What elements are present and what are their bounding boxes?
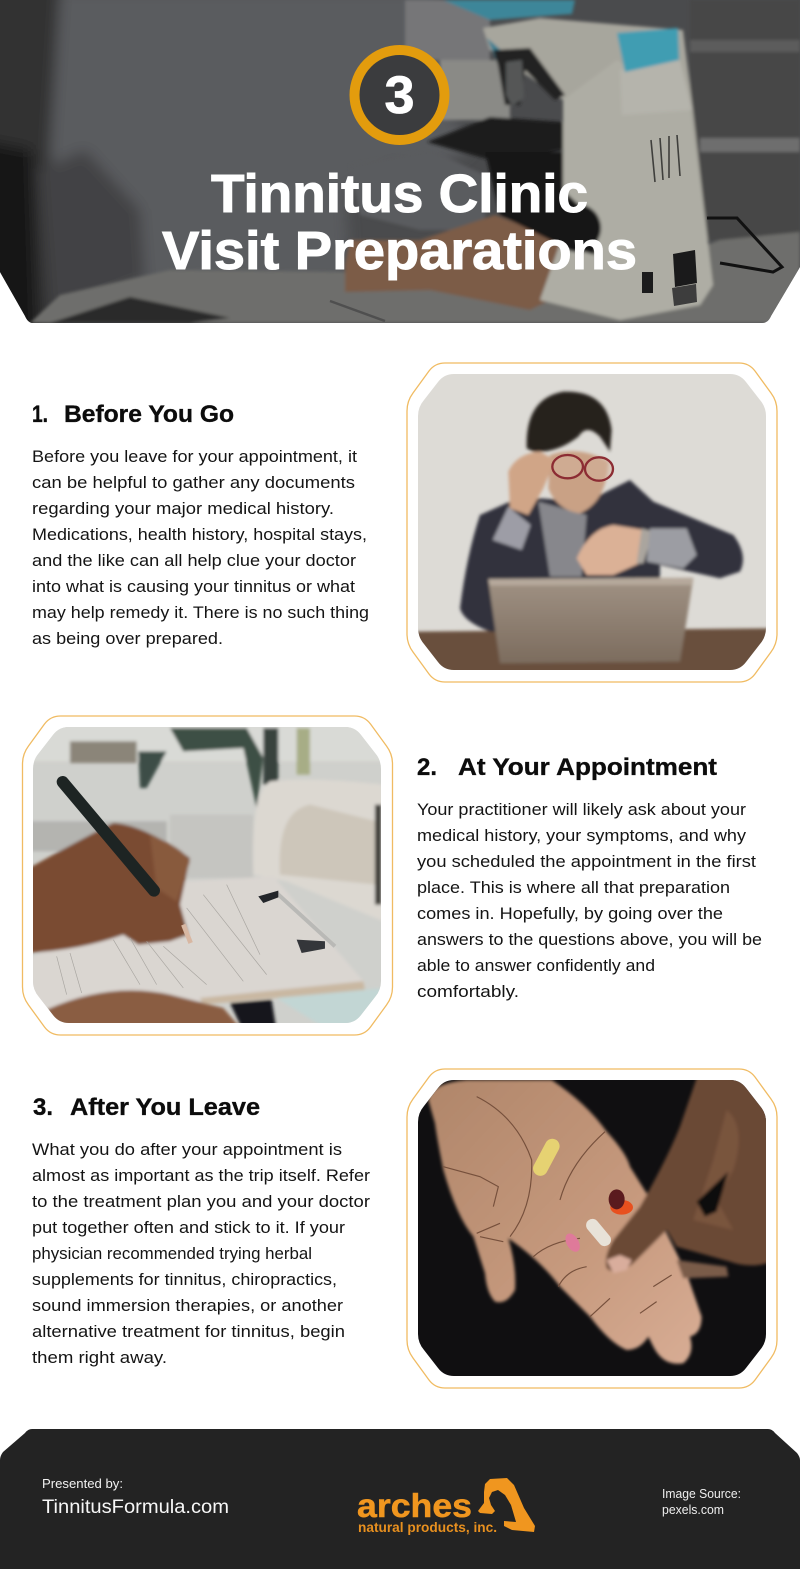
- body text 2: comes in. Hopefully, by going over the: [417, 904, 723, 923]
- title: Visit Preparations: [162, 221, 637, 281]
- body text 1: into what is causing your tinnitus or what: [32, 577, 355, 596]
- body text 3: almost as important as the trip itself. Refer: [32, 1166, 370, 1185]
- body text 3: put together often and stick to it. If your: [32, 1218, 345, 1237]
- body text 1: as being over prepared.: [32, 629, 223, 648]
- body text 2: [417, 800, 762, 1001]
- image source credit: [662, 1487, 741, 1517]
- image frame 3: pills in open palm: [407, 1069, 777, 1388]
- sleeve near stage: [355, 160, 486, 230]
- body text 1: may help remedy it. There is no such thing: [32, 603, 369, 622]
- presented by: [42, 1476, 229, 1518]
- objective: [493, 48, 565, 105]
- teal: [443, 0, 575, 20]
- body text 3: alternative treatment for tinnitus, begin: [32, 1322, 345, 1341]
- microscope body: [482, 16, 710, 250]
- heading 3: 3.: [33, 1094, 53, 1121]
- body text 3: them right away.: [32, 1348, 167, 1367]
- table: [30, 232, 800, 323]
- body text 3: sound immersion therapies, or another: [32, 1296, 343, 1315]
- body text 1: regarding your major medical history.: [32, 499, 334, 518]
- logo: arches natural products: [357, 1478, 535, 1535]
- number badge: gold ring with 3: 3: [384, 66, 414, 125]
- image frame 1: man checking his watch: [407, 363, 777, 682]
- logo: arches natural products: arches: [357, 1487, 472, 1524]
- body text 3: What you do after your appointment is: [32, 1140, 342, 1159]
- body text 3: [32, 1140, 370, 1367]
- image frame 2: hand writing on clipboard: [22, 716, 392, 1035]
- body text 1: [32, 447, 369, 648]
- section 1 text: Before You Go: [32, 401, 369, 648]
- body text 1: Medications, health history, hospital stays,: [32, 525, 367, 544]
- presented by: Presented by:: [42, 1476, 123, 1491]
- image source credit: Image Source:: [662, 1487, 741, 1501]
- body text 1: Before you leave for your appointment, it: [32, 447, 357, 466]
- number badge: gold ring with 3: [354, 50, 444, 140]
- body text 2: Your practitioner will likely ask about your: [417, 800, 746, 819]
- title: Tinnitus Clinic: [211, 164, 588, 224]
- body text 3: to the treatment plan you and your doctor: [32, 1192, 370, 1211]
- section 3 text: After You Leave: [32, 1094, 370, 1367]
- body text 1: can be helpful to gather any documents: [32, 473, 355, 492]
- heading 1: 1.: [32, 401, 48, 428]
- body text 2: you scheduled the appointment in the first: [417, 852, 756, 871]
- header photo: microscope in clinic: [0, 0, 800, 340]
- heading 2: At Your Appointment: [458, 754, 717, 781]
- stage and knob: [427, 117, 563, 160]
- body text 1: and the like can all help clue your doctor: [32, 551, 356, 570]
- panel: footer: [0, 1429, 800, 1569]
- body text 2: medical history, your symptoms, and why: [417, 826, 747, 845]
- heading 3: After You Leave: [70, 1094, 260, 1121]
- body text 2: comfortably.: [417, 982, 519, 1001]
- fine microscope details: [651, 135, 680, 182]
- panel: header banner: [0, 0, 800, 340]
- body text 2: able to answer confidently and: [417, 956, 655, 975]
- body text 3: supplements for tinnitus, chiropractics,: [32, 1270, 337, 1289]
- heading 1: Before You Go: [64, 401, 234, 428]
- title: [162, 164, 637, 281]
- image source credit: pexels.com: [662, 1503, 724, 1517]
- body text 3: physician recommended trying herbal: [32, 1244, 312, 1263]
- hand: [345, 215, 570, 310]
- body text 2: place. This is where all that preparation: [417, 878, 730, 897]
- body text 2: answers to the questions above, you will be: [417, 930, 762, 949]
- heading 2: 2.: [417, 754, 437, 781]
- section 2 text: At Your Appointment: [417, 754, 762, 1001]
- presented by: TinnitusFormula.com: [42, 1497, 229, 1518]
- wall and shelving behind: [405, 0, 490, 60]
- logo: arches natural products: natural products, inc.: [358, 1520, 497, 1535]
